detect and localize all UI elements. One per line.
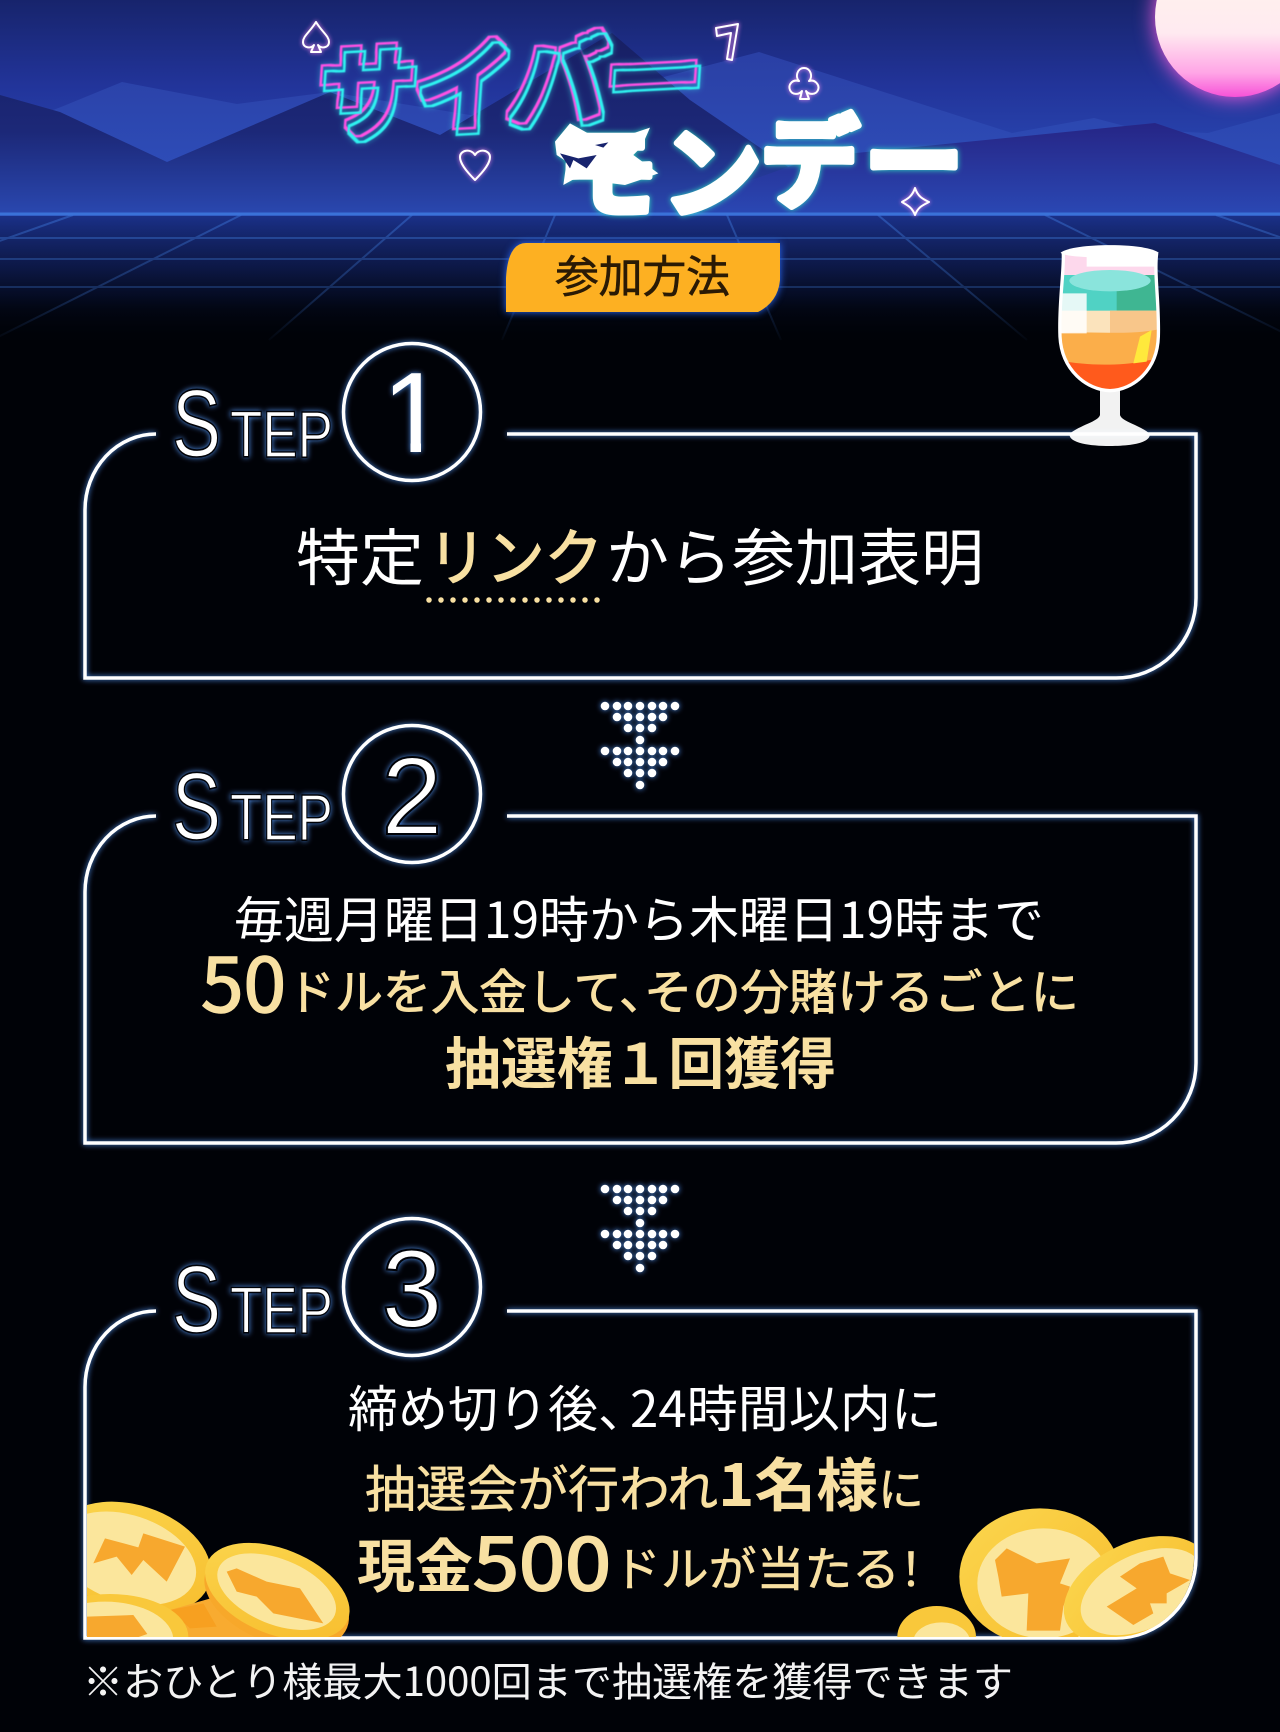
- icon: neon diamond: [902, 188, 929, 215]
- badge: 参加方法: 参加方法: [555, 241, 730, 305]
- step 3 label: 3: [381, 1228, 443, 1351]
- step 3 line 2: [365, 1439, 924, 1523]
- step 3 line 2: 抽選会が行われ: [365, 1450, 718, 1522]
- step 3 line 1: [348, 1370, 942, 1442]
- step 3 line 2: に: [878, 1454, 924, 1520]
- step 3 label: S: [172, 1246, 221, 1353]
- step 1 text: リンク: [428, 508, 603, 598]
- step 2 line 2: ドルを入金して、: [287, 953, 667, 1023]
- glass bowl: [1060, 253, 1158, 391]
- panel 2 outline: [85, 816, 1196, 1143]
- icon: neon heart: [460, 151, 490, 180]
- step 3 line 1: 締め切り後、: [348, 1370, 648, 1442]
- dotted underline: [429, 597, 604, 603]
- panel 1 outline: [85, 434, 1196, 678]
- icon: neon club: [789, 68, 818, 99]
- step 1 label: [172, 344, 480, 480]
- step 2 line 2: 50: [201, 925, 286, 1034]
- badge: 参加方法: [506, 241, 780, 312]
- panel: step 2: [85, 726, 1196, 1143]
- title: モンデー: モンデー: [558, 82, 964, 238]
- header scene: sky, mountains and neon floor: [0, 0, 1280, 346]
- step 2 line 3: 抽選権１回獲得: [445, 1020, 836, 1101]
- step 2 label: [172, 726, 480, 862]
- step 3 line 3: ！: [888, 1534, 934, 1600]
- step 2 label: S: [172, 753, 221, 860]
- icon: coin pile right: [897, 1508, 1194, 1637]
- step 3 label: [172, 1218, 480, 1356]
- step 3 line 3: 現金: [357, 1520, 473, 1604]
- step 1 label: 1: [382, 350, 445, 477]
- title: サイバー: サイバー: [317, 1, 710, 163]
- icon: coin pile left: [87, 1502, 1194, 1637]
- step 1 text: 特定: [296, 508, 424, 598]
- glass foot and stem: [1069, 390, 1150, 446]
- step 3 line 3: 500: [473, 1506, 611, 1611]
- step 2 line 2: [201, 925, 1079, 1034]
- step 3 label: TEP: [230, 1273, 333, 1347]
- panel 3 outline: [85, 1311, 1196, 1638]
- step 2 label: 2: [381, 735, 443, 858]
- arrow: step 1 to step 2: [601, 702, 679, 789]
- panel: step 3: [78, 1212, 1202, 1644]
- footnote: ※おひとり様最大1000回まで抽選権を獲得できます: [83, 1650, 1013, 1708]
- glass rim: [1061, 245, 1159, 258]
- step 2 line 2: その分賭けるごとに: [644, 953, 1079, 1023]
- step 3 line 3: ドルが当たる: [613, 1531, 900, 1600]
- step 3 line 2: 1名様: [718, 1439, 878, 1523]
- bowl outline: [1060, 253, 1158, 391]
- icon: layered cocktail glass: [1057, 245, 1163, 446]
- step 3 line 3: [357, 1506, 934, 1611]
- icon: neon seven: [716, 24, 738, 60]
- liquid top: [1069, 270, 1151, 291]
- step 1 label: TEP: [230, 397, 333, 471]
- step 2 line 1: 毎週月曜日19時から木曜日19時まで: [234, 881, 1044, 953]
- dragon head on モ: [555, 123, 658, 185]
- step 1 text: [296, 508, 984, 598]
- step 1 text: から参加表明: [606, 508, 984, 598]
- arrow: step 2 to step 3: [601, 1185, 679, 1272]
- panel: step 1: [85, 344, 1196, 678]
- step 2 label: TEP: [230, 780, 333, 854]
- drink layers: [1062, 254, 1157, 389]
- icon: neon spade: [303, 22, 329, 52]
- step 1 label: S: [172, 370, 221, 477]
- step 3 line 1: 24時間以内に: [630, 1370, 942, 1442]
- moon: [1155, 0, 1280, 97]
